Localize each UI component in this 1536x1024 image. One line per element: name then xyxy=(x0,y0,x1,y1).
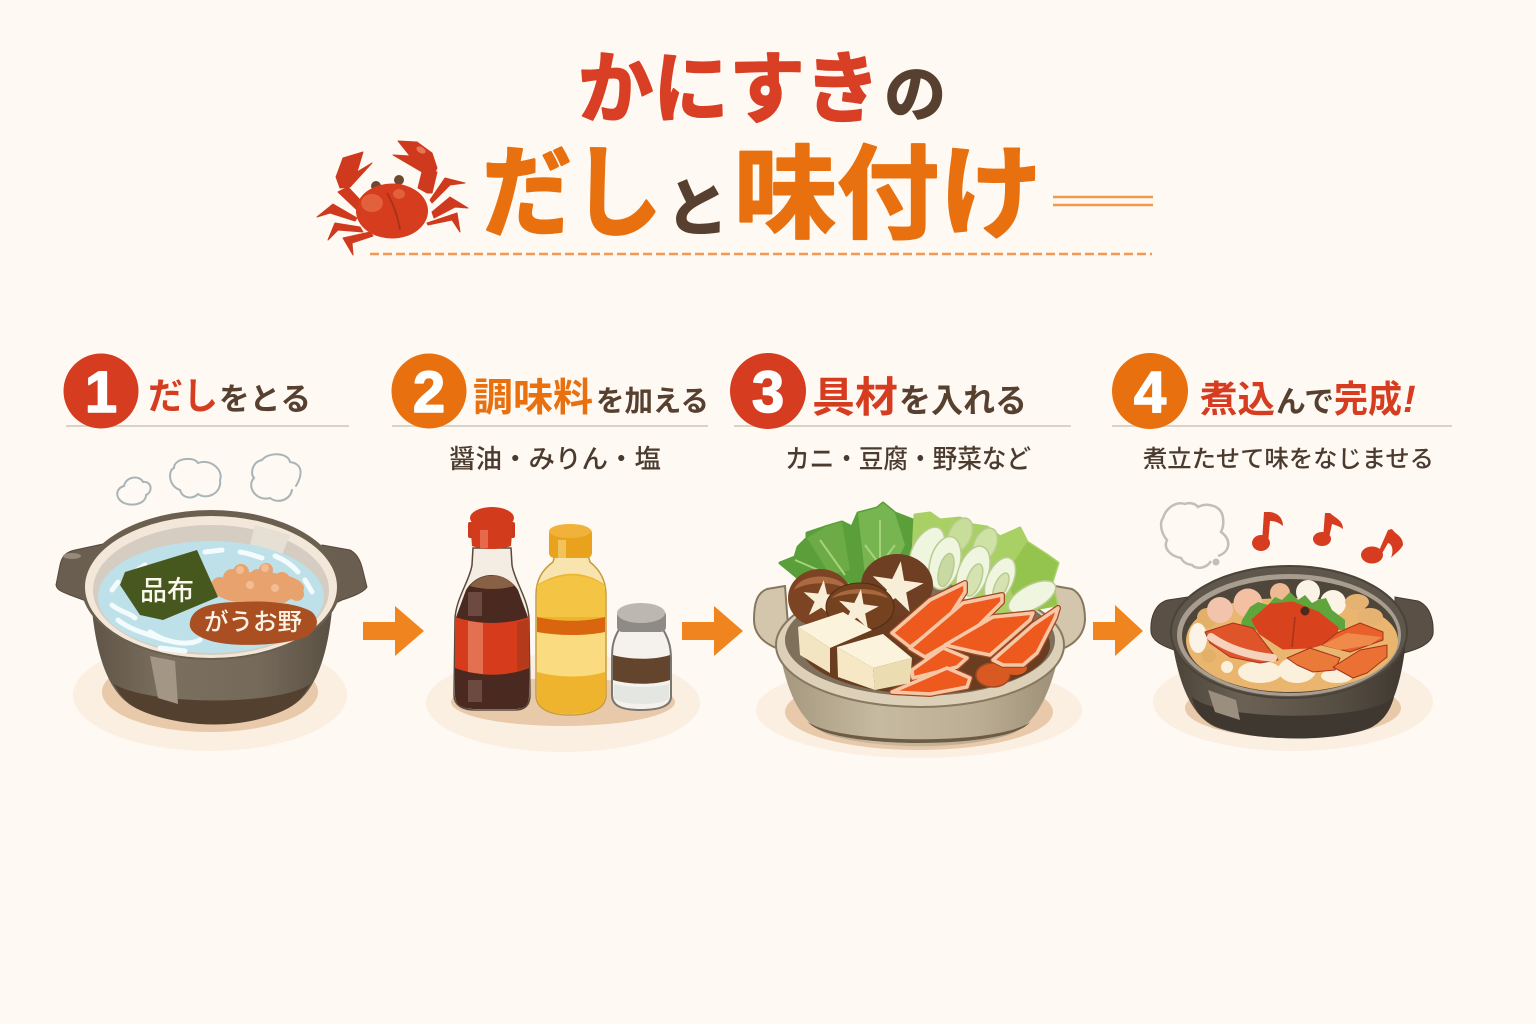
rim and interior xyxy=(81,510,341,660)
shadow xyxy=(756,662,1082,758)
title line 1: の xyxy=(884,61,946,130)
kombu label: 品布 xyxy=(140,576,194,606)
handles xyxy=(56,544,367,607)
number badge 4 xyxy=(1112,353,1188,429)
illustration: hot pot with ingredients xyxy=(754,503,1085,758)
number badge 1: 1 xyxy=(85,360,117,425)
title xyxy=(317,45,1153,255)
subtitle 4: 煮立たせて味をなじませる xyxy=(1143,446,1434,473)
crab shell and claws xyxy=(1205,592,1387,678)
pot body xyxy=(776,583,1064,746)
lettuce xyxy=(780,503,1058,615)
heading text 1: だし xyxy=(148,376,218,417)
steam clouds xyxy=(117,454,301,505)
title line 2: だし xyxy=(482,138,662,250)
water xyxy=(98,541,324,653)
arrow 2 xyxy=(682,606,743,656)
mirin bottle xyxy=(536,524,606,715)
heading text 3: 具材 xyxy=(812,374,898,421)
handles xyxy=(754,586,1085,652)
number badge 2 xyxy=(392,354,466,428)
music notes xyxy=(1252,512,1403,564)
heading text 4: 完成 xyxy=(1334,379,1402,420)
heading text 4 xyxy=(1200,379,1416,421)
step 4 heading xyxy=(1112,353,1452,473)
salt bottle xyxy=(612,603,671,710)
subtitle 3: カニ・豆腐・野菜など xyxy=(785,444,1031,474)
heading text 3: を入れる xyxy=(899,382,1027,419)
heading text 2: 調味料 xyxy=(473,377,593,420)
heading text 4: んで xyxy=(1276,386,1334,419)
illustration: seasoning bottles xyxy=(426,507,700,752)
shadow xyxy=(1153,653,1433,751)
number badge 3 xyxy=(730,353,806,429)
number badge 1 xyxy=(64,354,138,428)
heading text 1: をとる xyxy=(219,382,311,417)
heading text 4: ! xyxy=(1403,379,1416,421)
negi slices xyxy=(902,514,1061,620)
title line 2 xyxy=(482,138,1042,252)
number badge 4: 4 xyxy=(1134,360,1166,425)
heading text 2 xyxy=(473,377,709,420)
pot body xyxy=(92,610,332,724)
kombu label xyxy=(120,550,218,620)
crab legs xyxy=(892,583,1058,694)
arrow 1 xyxy=(363,606,424,656)
heading text 1 xyxy=(148,376,311,417)
step 1 heading xyxy=(64,354,349,428)
meatballs and vegetables xyxy=(1189,580,1383,683)
shiitake mushrooms xyxy=(788,554,933,631)
title dashed underline xyxy=(370,253,1152,255)
heading text 4: 煮込 xyxy=(1200,379,1275,420)
steam cloud xyxy=(1161,503,1228,568)
subtitle 2: 醤油・みりん・塩 xyxy=(449,444,661,474)
katsuobushi pile xyxy=(211,563,304,604)
heading text 3 xyxy=(812,374,1027,421)
title line 2: 味付け xyxy=(734,138,1042,252)
katsuobushi label: がうお野 xyxy=(204,609,302,636)
soy sauce bottle xyxy=(454,507,530,710)
step 2 heading xyxy=(392,354,709,474)
illustration: finished hot pot xyxy=(1151,503,1433,751)
number badge 2: 2 xyxy=(413,360,445,425)
shadow xyxy=(426,654,700,752)
soup xyxy=(1186,598,1398,692)
shadow xyxy=(73,639,347,751)
heading text 2: を加える xyxy=(596,385,709,418)
illustration: clay pot with dashi xyxy=(56,454,367,751)
katsuobushi label xyxy=(190,601,317,645)
number badge 3: 3 xyxy=(752,360,784,425)
tofu xyxy=(798,612,912,690)
title line 1: かにすき xyxy=(578,45,880,133)
icon: crab xyxy=(317,141,468,255)
arrow 3 xyxy=(1093,605,1143,656)
handles xyxy=(1151,597,1433,655)
step 3 heading xyxy=(730,353,1071,474)
pot body xyxy=(1171,566,1407,738)
title double rule xyxy=(1053,197,1153,205)
title line 2: と xyxy=(666,175,728,244)
